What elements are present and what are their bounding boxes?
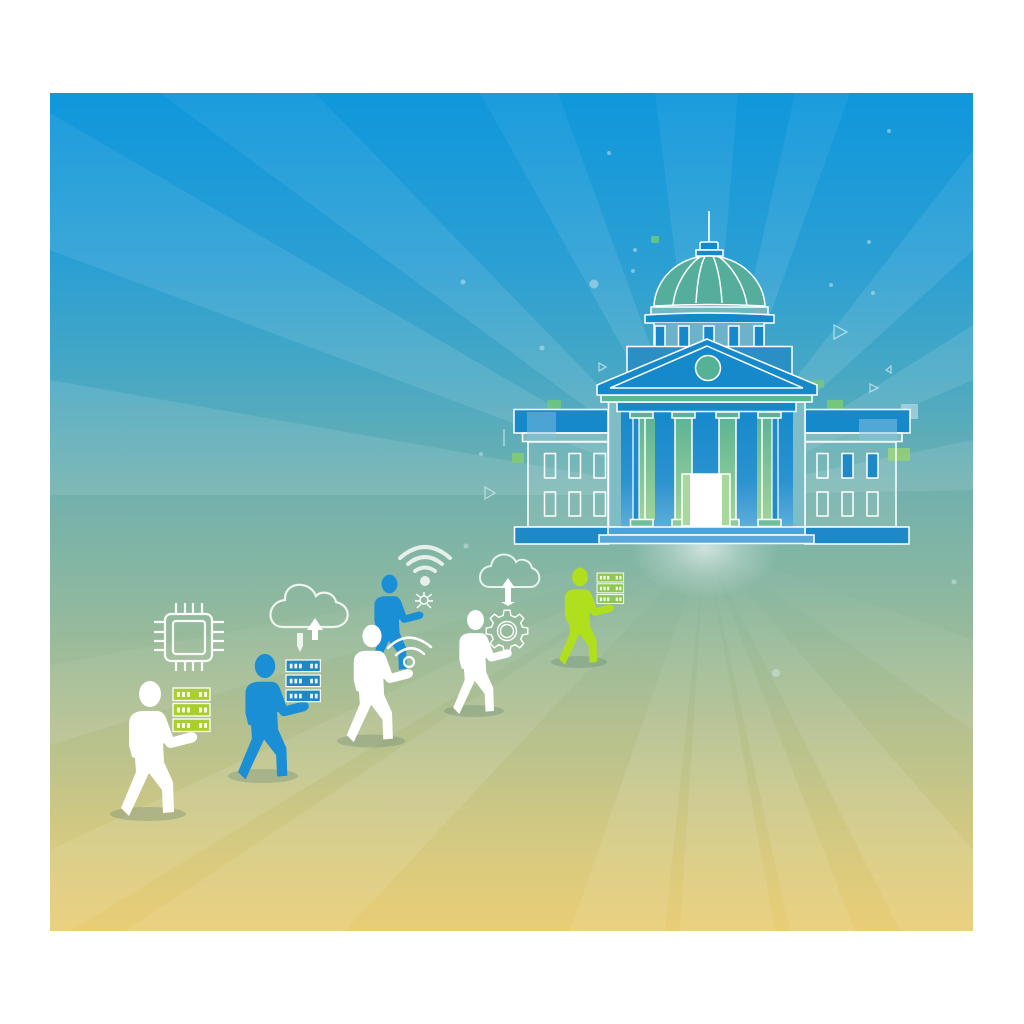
upper sun rays	[50, 93, 973, 495]
doorway	[682, 474, 730, 526]
walker 3: white figure with wifi	[337, 625, 431, 748]
entablature	[601, 395, 812, 402]
pediment	[597, 339, 817, 395]
dome	[654, 256, 765, 306]
attic block	[627, 346, 792, 376]
walker 5: green figure with racks	[551, 568, 624, 668]
spire	[708, 211, 710, 242]
wifi icon	[400, 547, 450, 586]
server racks	[173, 688, 210, 732]
front steps	[599, 527, 814, 544]
light glow under entrance	[630, 498, 780, 598]
server racks	[286, 660, 320, 702]
floating particles	[460, 129, 956, 677]
building	[514, 211, 910, 544]
central portico	[608, 402, 805, 527]
floating data squares	[503, 236, 918, 463]
drum colonnade	[654, 323, 764, 347]
left wing	[514, 410, 608, 544]
dome drum band	[645, 307, 774, 323]
gear icon	[486, 610, 528, 652]
floating triangles	[485, 325, 891, 499]
cloud with up and down arrows	[270, 585, 348, 652]
circuit bug icon	[415, 592, 433, 608]
wifi icon	[388, 638, 431, 667]
infographic scene	[50, 93, 973, 931]
walker 4: white figure with gear	[444, 610, 528, 717]
lower sun rays	[50, 715, 973, 931]
server racks	[597, 573, 624, 604]
background panel	[50, 93, 973, 931]
columns	[630, 412, 781, 526]
right wing	[805, 410, 910, 544]
walker 1: white figure with racks	[110, 681, 210, 821]
dome lantern	[696, 242, 723, 256]
walker 2b: blue figure behind	[369, 547, 450, 672]
cloud with double arrow	[480, 555, 539, 606]
chip icon	[154, 603, 224, 671]
walker 2: blue figure with racks	[228, 654, 320, 783]
